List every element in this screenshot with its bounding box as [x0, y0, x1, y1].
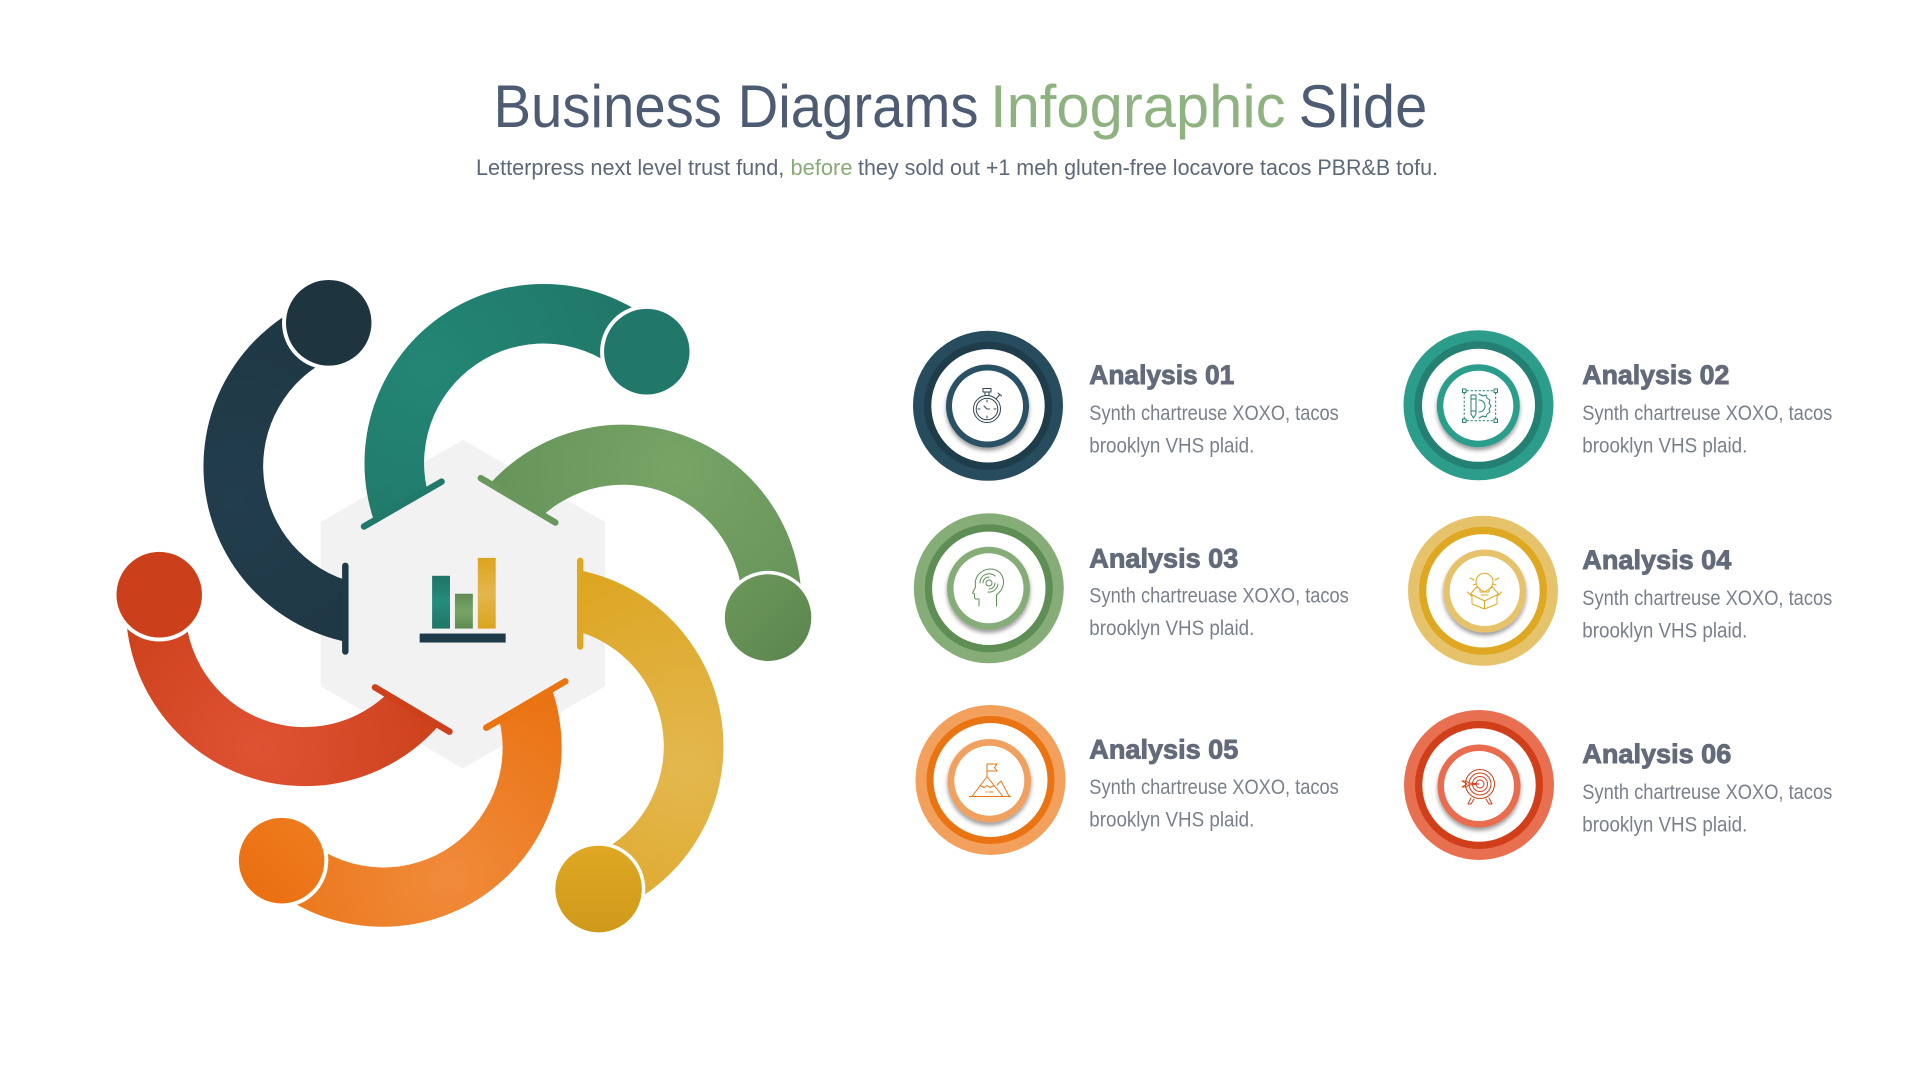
badge 04 — [1408, 516, 1558, 666]
heading 01: Analysis 01 — [1089, 360, 1234, 390]
heading 06: Analysis 06 — [1582, 739, 1731, 769]
icon: bar chart — [420, 558, 506, 643]
text 03: brooklyn VHS plaid. — [1089, 617, 1254, 640]
text 04: brooklyn VHS plaid. — [1582, 620, 1747, 642]
subtitle: before — [790, 155, 852, 180]
heading 03: Analysis 03 — [1089, 544, 1238, 574]
text 05: Synth chartreuse XOXO, tacos — [1089, 776, 1339, 799]
heading 05: Analysis 05 — [1089, 734, 1238, 764]
badge 06 — [1404, 710, 1554, 860]
icon: mountain with flag — [970, 764, 1010, 796]
text 04 — [1582, 587, 1832, 642]
text 02 — [1582, 402, 1832, 458]
arc: orange — [235, 681, 565, 927]
badge 01 — [913, 331, 1063, 481]
title: Business Diagrams — [494, 73, 978, 140]
item: Analysis 06 — [1404, 710, 1832, 860]
text 06: Synth chartreuse XOXO, tacos — [1582, 781, 1832, 804]
text 01: Synth chartreuse XOXO, tacos — [1089, 402, 1339, 425]
title: Slide — [1299, 73, 1427, 140]
item: Analysis 05 — [916, 705, 1339, 855]
icon: target with arrow — [1462, 770, 1494, 804]
text 01: brooklyn VHS plaid. — [1089, 435, 1254, 458]
arc: navy — [203, 276, 375, 651]
subtitle: they sold out +1 meh gluten-free locavore tacos PBR&B tofu. — [858, 155, 1438, 180]
title — [494, 73, 1427, 140]
heading 02: Analysis 02 — [1582, 360, 1729, 390]
icon: pencil and gear — [1462, 389, 1498, 422]
item: Analysis 03 — [914, 513, 1349, 663]
icon: stopwatch — [974, 388, 1002, 422]
text 05 — [1089, 776, 1339, 832]
arc: green — [481, 425, 815, 664]
badge 03 — [914, 513, 1064, 663]
icon: head with maze — [972, 569, 1004, 606]
text 03: Synth chartreuase XOXO, tacos — [1089, 584, 1349, 608]
title: Infographic — [990, 73, 1286, 140]
diagram: hexagon with six arcs — [113, 276, 815, 936]
badge 05 — [916, 705, 1066, 855]
text 05: brooklyn VHS plaid. — [1089, 809, 1254, 832]
text 02: Synth chartreuse XOXO, tacos — [1582, 402, 1832, 425]
text 06: brooklyn VHS plaid. — [1582, 814, 1747, 837]
text 02: brooklyn VHS plaid. — [1582, 435, 1747, 458]
text 06 — [1582, 781, 1832, 837]
arc: yellow — [552, 561, 723, 936]
arc: red — [113, 548, 449, 786]
center hexagon — [321, 440, 605, 769]
text 04: Synth chartreuse XOXO, tacos — [1582, 587, 1832, 610]
badge 02 — [1404, 330, 1554, 480]
item: Analysis 01 — [913, 331, 1339, 481]
arc: teal — [364, 284, 694, 526]
text 01 — [1089, 402, 1339, 458]
item: Analysis 04 — [1408, 516, 1832, 666]
subtitle — [476, 155, 1438, 180]
subtitle: Letterpress next level trust fund, — [476, 155, 784, 180]
item: Analysis 02 — [1404, 330, 1832, 480]
icon: box with light bulb — [1468, 573, 1502, 609]
heading 04: Analysis 04 — [1582, 545, 1731, 575]
text 03 — [1089, 584, 1349, 640]
